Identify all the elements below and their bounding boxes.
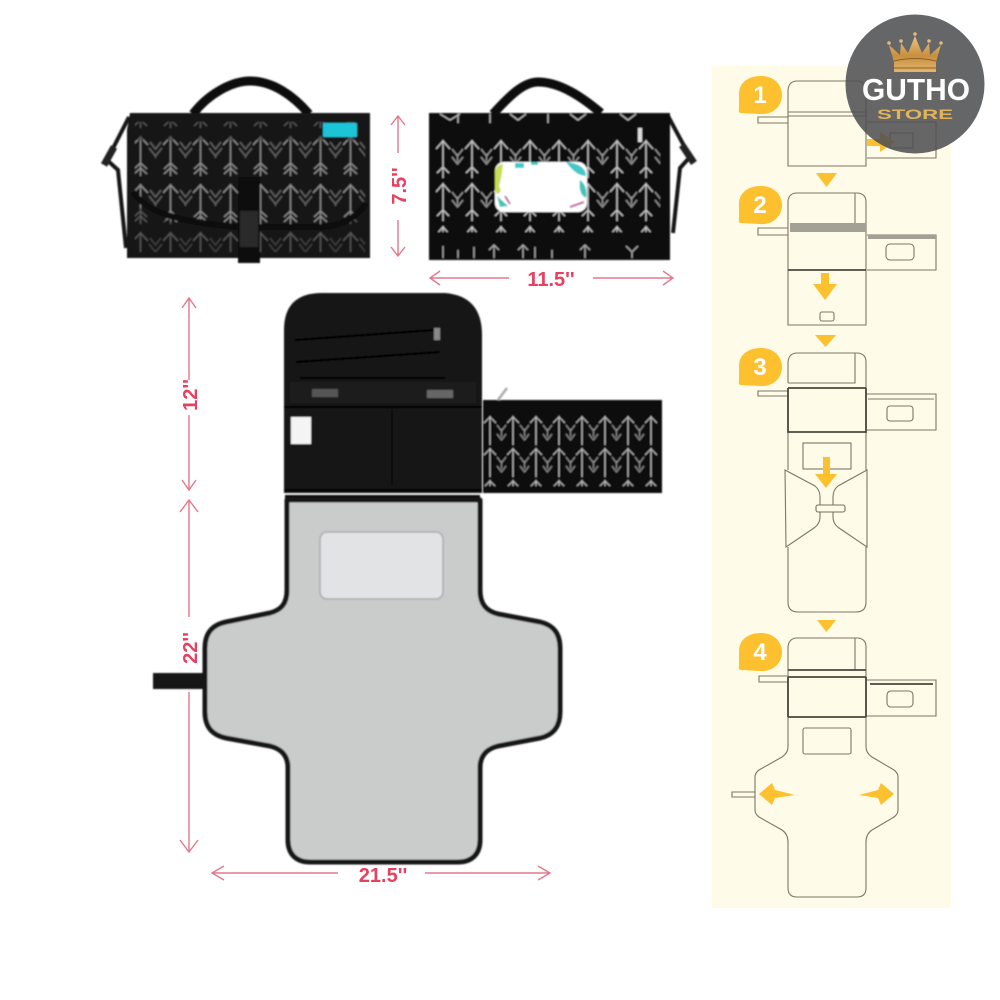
bag handle: [193, 81, 309, 114]
zip pull: [498, 388, 507, 400]
logo disc: [846, 14, 984, 154]
clasp: [238, 177, 260, 263]
side window 4: [887, 691, 913, 707]
grey band: [790, 223, 866, 232]
side panel 3: [867, 394, 936, 430]
badge 2: 2: [753, 192, 767, 219]
strap: [816, 505, 845, 512]
dimension: 21.5 inch width: [212, 865, 550, 887]
badge 3: 3: [753, 354, 767, 381]
care label: [291, 417, 311, 444]
step 4: [732, 633, 936, 897]
buckle right: [427, 390, 453, 398]
arrow left: [759, 783, 795, 805]
diagram 4 outline: [732, 638, 898, 897]
bag handle: [493, 82, 601, 114]
step 3: [739, 348, 936, 632]
section body: [483, 400, 662, 493]
panel: open bag upper pocket section: [284, 293, 482, 493]
wipes window: [495, 162, 587, 212]
side panel 1: [867, 122, 936, 158]
pocket panel: [284, 293, 482, 493]
step 2: [739, 186, 936, 347]
pocket folds: [284, 330, 482, 490]
diagram 3 top: [758, 353, 866, 612]
clasp sheen: [240, 211, 258, 247]
side window: [886, 244, 914, 260]
dimension: 12 inch height: 12'': [180, 379, 202, 411]
top hinge bar: [285, 495, 480, 501]
logo badge: [846, 14, 984, 154]
diagram 4 folds: [788, 670, 866, 717]
dimension: 7.5 inch height: [389, 116, 411, 256]
top print strip: [440, 114, 636, 123]
triangle connector 1: [816, 173, 837, 187]
side band: [868, 235, 936, 239]
dimension: 21.5 inch width: 21.5'': [359, 865, 407, 887]
arrow print: [484, 415, 657, 486]
bag body: [127, 113, 370, 258]
arrow 1: [867, 132, 895, 152]
arrow print: [135, 122, 365, 252]
diagram 1: [758, 81, 866, 166]
badge 4: 4: [753, 639, 767, 666]
side window 3: [887, 406, 913, 421]
panel: folding instructions: [712, 66, 951, 908]
badge 1: [739, 76, 782, 114]
dimension: 11.5 inch width: 11.5'': [527, 269, 575, 291]
organiser band: [290, 382, 476, 403]
side strap: [107, 117, 129, 248]
dimension: 7.5 inch height: 7.5'': [389, 167, 411, 205]
triangle connector 2: [815, 335, 836, 347]
side strap: [668, 116, 690, 233]
mat hanging tab: [153, 673, 205, 689]
lower shade: [132, 200, 367, 253]
dimension: 11.5 inch width: [430, 269, 673, 291]
zip pull: [638, 128, 642, 142]
panel: front of folded bag: [104, 81, 370, 263]
pocket divider: [391, 410, 393, 485]
arrow 3: [815, 457, 837, 488]
clear mat pocket: [320, 532, 443, 599]
badge 3: [739, 348, 782, 386]
badge 1: 1: [753, 82, 767, 109]
side panel 2: [867, 235, 936, 270]
side panel 4: [867, 680, 936, 716]
dimension: 22 inch height: [180, 500, 202, 852]
strap buckle: [104, 147, 114, 165]
bottom print strip: [443, 245, 638, 258]
arrow right: [859, 783, 894, 805]
upper shade: [132, 118, 366, 140]
dimension: 22 inch height: 22'': [180, 632, 202, 664]
folded flaps: [785, 470, 867, 547]
panel: unfolded changing mat: [153, 495, 560, 862]
diagram 3 fold: [788, 388, 866, 432]
badge 2: [739, 186, 782, 224]
clear pocket: [803, 443, 851, 469]
triangle connector 3: [817, 620, 836, 632]
diagram 2: [758, 193, 866, 325]
brand name: GUTHO: [862, 72, 970, 107]
panel: back of folded bag: [429, 82, 694, 260]
arrow 2: [813, 273, 837, 300]
panel: pull-out wipes section: [483, 388, 662, 493]
flap edge: [133, 192, 366, 227]
step 1: [739, 76, 936, 187]
dimension: 12 inch height: [180, 298, 202, 490]
clear pocket 4: [803, 728, 851, 754]
mat surface: [205, 500, 560, 862]
buckle left: [312, 389, 338, 397]
dark fold: [788, 269, 866, 271]
strap buckle: [682, 145, 694, 163]
side zip: [870, 683, 933, 685]
arrow print: [436, 136, 660, 232]
small window: [820, 312, 834, 321]
crown icon: [887, 32, 943, 72]
zip pull: [434, 328, 440, 340]
bag body: [429, 113, 670, 260]
brand subtitle: STORE: [877, 106, 953, 122]
badge 4: [739, 633, 782, 671]
brand tag: [323, 123, 357, 137]
